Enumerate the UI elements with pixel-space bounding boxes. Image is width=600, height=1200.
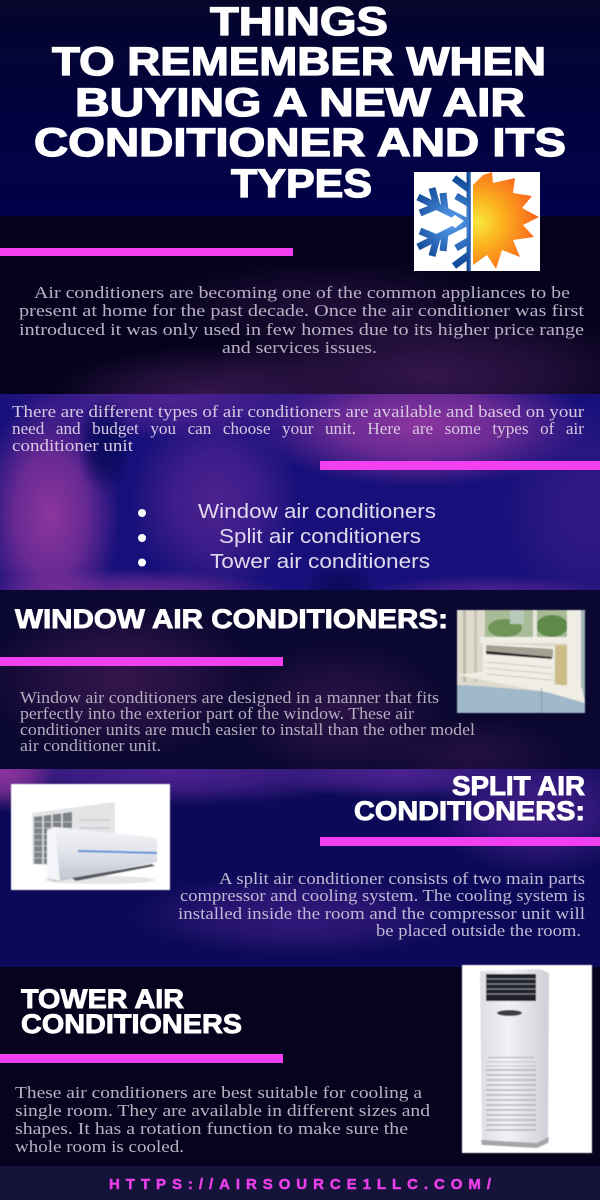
divider bar: types: [320, 461, 600, 470]
photo: window air conditioner: [457, 610, 585, 713]
text block: types intro: need and budget you can choose your unit. Here are some types of air: [12, 419, 585, 438]
text block: intro: and services issues.: [222, 338, 377, 357]
text block: window description: conditioner units are much easier to install than the other model: [20, 720, 475, 739]
text block: split description: compressor and cooling system. The cooling system is: [180, 886, 585, 905]
text block: intro: introduced it was only used in few homes due to its higher price range: [19, 320, 584, 339]
heading: tower air conditioners: CONDITIONERS: [21, 1009, 242, 1039]
title: [34, 0, 566, 206]
panel: window section background: [0, 590, 600, 769]
text block: window description: [20, 688, 475, 755]
heading: tower air conditioners: [21, 984, 242, 1039]
text block: tower description: shapes. It has a rotation function to make sure the: [15, 1119, 408, 1138]
panel: types background: [0, 394, 600, 590]
text block: tower description: These air conditioners are best suitable for cooling a: [15, 1083, 423, 1102]
divider bar: tower: [0, 1054, 283, 1063]
title: CONDITIONER AND ITS: [34, 121, 566, 165]
panel: title background: [0, 0, 600, 216]
heading: split air conditioners: CONDITIONERS:: [354, 796, 585, 826]
text block: window description: Window air conditioners are designed in a manner that fits: [20, 688, 439, 707]
list: air conditioner types: Window air conditioners: [198, 501, 436, 523]
text block: types intro: [12, 402, 585, 455]
heading: split air conditioners: SPLIT AIR: [452, 771, 585, 801]
text block: split description: be placed outside the room.: [376, 921, 581, 940]
list: air conditioner types: Tower air conditioners: [210, 551, 430, 573]
text block: types intro: There are different types of air conditioners are available and based on your: [12, 402, 585, 421]
text block: split description: installed inside the room and the compressor unit will: [178, 904, 585, 923]
divider bar: window: [0, 657, 283, 666]
text block: split description: A split air conditioner consists of two main parts: [219, 869, 585, 888]
list: air conditioner types: [138, 501, 436, 573]
text block: window description: air conditioner unit.: [20, 736, 161, 755]
panel: intro background: [72, 272, 600, 394]
text block: intro: Air conditioners are becoming one of the common appliances to be: [34, 283, 570, 302]
text block: tower description: single room. They are available in different sizes and: [15, 1101, 431, 1120]
text block: intro: present at home for the past decade. Once the air conditioner was first: [19, 301, 584, 320]
divider bar: title: [0, 248, 293, 256]
text block: split description: [178, 869, 585, 940]
text block: types intro: conditioner unit: [12, 436, 133, 455]
text block: window description: perfectly into the exterior part of the window. These air: [20, 704, 415, 723]
title: THINGS: [210, 0, 388, 44]
heading: split air conditioners: [354, 771, 585, 826]
heading: tower air conditioners: TOWER AIR: [21, 984, 184, 1014]
icon: snowflake and sun: [414, 172, 540, 271]
photo: tower air conditioner: [462, 965, 592, 1153]
text block: tower description: [15, 1083, 431, 1156]
panel: footer background: [0, 1166, 600, 1200]
heading: window air conditioners: WINDOW AIR CONDITIONERS:: [15, 604, 448, 634]
text block: intro: [19, 283, 584, 357]
list: air conditioner types: Split air conditioners: [219, 526, 421, 548]
photo: split air conditioner: [11, 784, 170, 890]
text block: tower description: whole room is cooled.: [15, 1137, 184, 1156]
title: TO REMEMBER WHEN: [52, 40, 546, 84]
icon detail: flake diamond: [447, 215, 464, 228]
panel: tower section background: [0, 967, 600, 1166]
title: TYPES: [231, 162, 372, 206]
divider bar: split: [320, 837, 600, 846]
footer url: HTTPS://AIRSOURCE1LLC.COM/: [109, 1176, 492, 1193]
panel: split section background: [0, 769, 600, 967]
title: BUYING A NEW AIR: [75, 81, 525, 125]
